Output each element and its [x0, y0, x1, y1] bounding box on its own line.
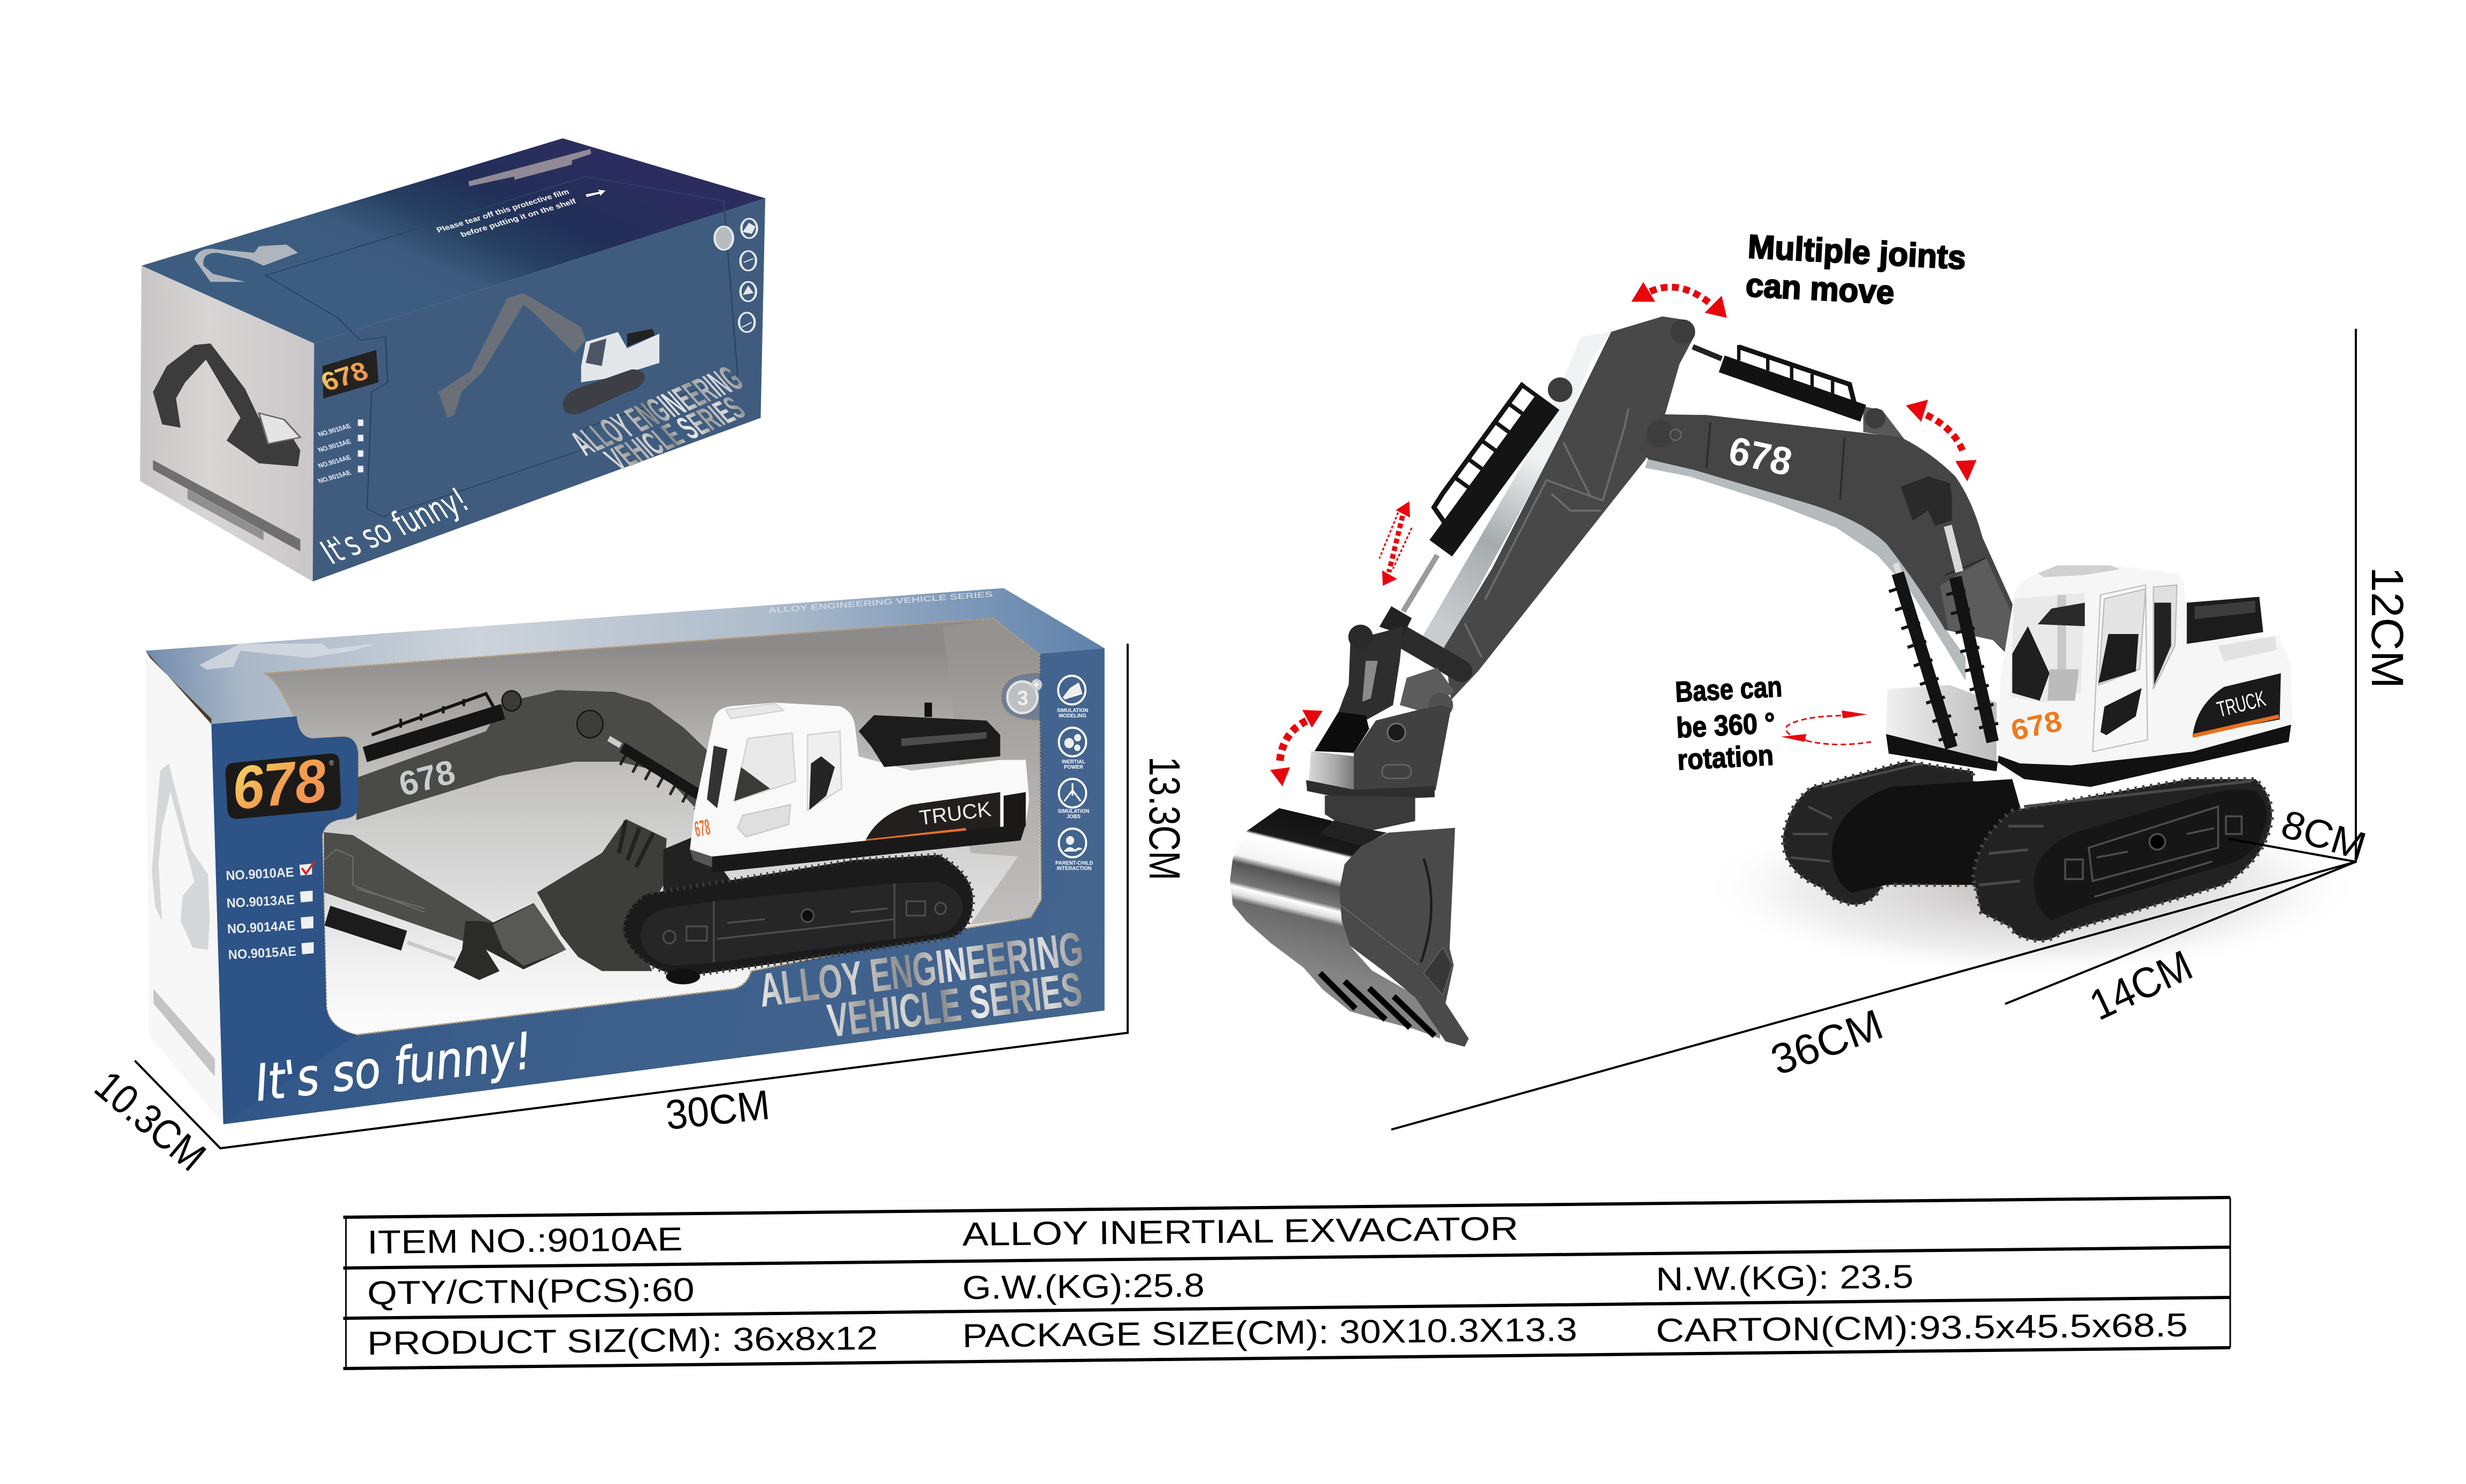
feature icons with captions: SIMULATION: [1058, 808, 1089, 815]
product box: rear angled view: [140, 138, 765, 582]
feature icons with captions: INTERACTION: [1057, 866, 1092, 872]
motion arrow: bucket: [1270, 710, 1323, 786]
model number list: NO.9013AE: [226, 893, 295, 911]
table cells: ALLOY INERTIAL EXVACATOR: [962, 1210, 1519, 1253]
linkage bar: [1400, 635, 1461, 671]
right lift cylinder: [1955, 577, 1993, 742]
bucket hitch: [1320, 821, 1387, 846]
feature icons with captions: POWER: [1064, 764, 1083, 770]
tear-off instruction on top: Please tear off this protective film: [435, 188, 571, 234]
width label: 14CM: [2083, 941, 2199, 1029]
model number list: NO.9010AE: [226, 865, 295, 884]
roof hatch: [726, 704, 784, 718]
door window with seat: [807, 731, 842, 810]
near track top tread: [1979, 781, 2252, 885]
specification table: [343, 1197, 2230, 1369]
table cells: N.W.(KG): 23.5: [1655, 1258, 1914, 1298]
model number list: NO.9010AE: [317, 423, 352, 438]
windshield edge: [707, 746, 727, 808]
left lift cylinder: [1898, 573, 1952, 748]
lower hydraulic cylinder: [327, 916, 455, 960]
centre frame: [1832, 779, 2020, 893]
cab logo: 678: [2008, 705, 2064, 747]
truck label: TRUCK: [2215, 686, 2268, 722]
slogan on front face: It's so funny!: [311, 481, 479, 571]
side plate seam: [1340, 905, 1418, 965]
large excavator illustration: [1230, 316, 2363, 1047]
bucket teeth: [619, 821, 653, 867]
far track tread lines: [1791, 763, 1922, 861]
depth label: 8CM: [2276, 801, 2371, 869]
box depth label: 10.3CM: [86, 1062, 214, 1180]
window outline impression: [266, 176, 738, 517]
table rules: [343, 1197, 2230, 1369]
left lift rod: [1895, 563, 1899, 574]
motion arrow: stick pivot: [1631, 282, 1727, 318]
model number list: NO.9013AE: [317, 438, 352, 454]
box dimension lines: [135, 644, 1128, 1148]
track assembly: [623, 855, 973, 977]
stick pivot: [1670, 320, 1695, 344]
body skirt: [1886, 722, 2292, 787]
near track side plate: [2034, 790, 2267, 920]
table cells: PACKAGE SIZE(CM): 30X10.3X13.3: [962, 1311, 1577, 1355]
linkage side plates: [1338, 627, 1403, 722]
roof hatch: [2038, 566, 2120, 577]
bracket chrome face: [1308, 751, 1354, 794]
box height label: 13.3CM: [1140, 756, 1189, 880]
model number list: NO.9015AE: [317, 469, 352, 485]
engine cover vents: [2218, 636, 2277, 661]
track side plate: [641, 882, 963, 966]
packaged excavator: [324, 676, 1093, 1048]
boom with cylinders: [1638, 345, 2013, 681]
bucket bracket: [1354, 705, 1451, 799]
far track: [1783, 761, 1973, 905]
model number list: [317, 420, 364, 485]
stick arm: [324, 832, 499, 948]
brand logo: ®: [329, 759, 334, 767]
feature icons with captions: [1055, 676, 1093, 872]
model number list: NO.9015AE: [228, 944, 297, 963]
stick emboss: [324, 849, 425, 912]
cab and engine body: [690, 702, 1029, 859]
stick piston rod: [1403, 555, 1437, 612]
boom pivot: [1647, 420, 1674, 447]
lower door vent: [2100, 688, 2141, 735]
model number list: NO.9014AE: [317, 454, 352, 470]
windshield dark panel: [2012, 626, 2049, 701]
product dimension lines: [1391, 329, 2356, 1130]
rear dark panel: [1004, 792, 1026, 830]
age badge: 3: [1018, 687, 1028, 710]
boom logo: 678: [1725, 428, 1796, 484]
truck panel: [2193, 673, 2281, 736]
callout: base rotation: Base can: [1674, 671, 1783, 708]
bracket hole: [1388, 723, 1405, 741]
text: ALLOY ENGINEERING: [562, 359, 752, 463]
hood stack: [924, 702, 932, 717]
packaged excavator: 678: [692, 814, 712, 842]
cab seat base: [2047, 669, 2079, 701]
tear-off instruction on top: before putting it on the shelf: [459, 197, 578, 239]
near track: [1973, 779, 2272, 941]
stick embossed pipes: [1465, 408, 1628, 658]
cab seat: [809, 756, 835, 810]
front strip left of window: [211, 716, 358, 1124]
box left side panel: [145, 651, 224, 1124]
top cylinder: [1693, 345, 1885, 429]
digging bucket: [1230, 808, 1469, 1047]
wear plate: [1424, 947, 1452, 995]
stick cylinder: [1434, 377, 1573, 548]
door outline: [2093, 585, 2147, 752]
boom panel seams: [1706, 422, 1986, 575]
upper hydraulic cylinder: [365, 691, 718, 815]
boom underside: [1645, 458, 1966, 681]
model number list: NO.9014AE: [227, 918, 296, 937]
side plate rib: [1421, 859, 1431, 962]
callout: multiple joints: Multiple joints: [1747, 228, 1967, 276]
motion arrow: boom pivot: [1906, 400, 1976, 482]
callout: base rotation: rotation: [1676, 739, 1774, 776]
box left side face: [140, 266, 314, 582]
table cells: QTY/CTN(PCS):60: [367, 1272, 695, 1312]
series title: [757, 922, 1086, 1048]
ghost excavator on flap: [199, 644, 377, 670]
box length label: 30CM: [664, 1081, 772, 1139]
bracket lower block: [1325, 795, 1415, 834]
truck panel: [864, 792, 1000, 844]
cab shell: [1999, 566, 2293, 766]
truck label: TRUCK: [918, 798, 992, 830]
ground shadow: [1700, 797, 2363, 978]
boom: [356, 690, 725, 820]
miniature excavator on top face: [195, 245, 298, 282]
logo on front face: 678: [314, 357, 375, 397]
boom logo: 678: [396, 753, 459, 804]
door seat: [2099, 634, 2139, 683]
slogan: It's so funny!: [252, 1022, 535, 1112]
feature icons with captions: SIMULATION: [1057, 708, 1088, 714]
model number list: [226, 865, 297, 963]
series title: ALLOY ENGINEERING: [757, 922, 1086, 1017]
hood vent: [2194, 601, 2255, 619]
flap edge: [145, 651, 211, 724]
callout: multiple joints: [1745, 228, 1967, 312]
box top flap: [145, 588, 1105, 724]
cab side window: [734, 733, 796, 801]
motion arrow: stick cylinder: [1380, 501, 1412, 586]
rear undercarriage: [663, 835, 731, 900]
seat backrest: [2038, 602, 2085, 626]
rear window dark: [2154, 602, 2171, 685]
lower door window: [738, 805, 790, 837]
undercarriage and cab: [1783, 566, 2293, 941]
motion arrow: base rotation: [1781, 710, 1871, 745]
cab pillar: [2057, 595, 2066, 677]
callout: multiple joints: can move: [1745, 267, 1895, 312]
feature icons with captions: MODELING: [1059, 713, 1086, 719]
orange stripe: [2193, 716, 2279, 736]
age badge: [1007, 679, 1042, 713]
stick body: [1444, 316, 1695, 700]
boom cylinder head: [1901, 476, 1960, 572]
engine hood: [2187, 597, 2263, 644]
length label: 36CM: [1764, 1000, 1889, 1084]
boom body: [1638, 414, 2013, 657]
age badge and feature icons: [715, 219, 757, 332]
window opening with interior: [264, 619, 1041, 1035]
bucket side plate: [1339, 828, 1469, 1047]
series title: VEHICLE SERIES: [825, 963, 1085, 1048]
hood vent: [901, 732, 987, 746]
brand logo: 678: [230, 746, 329, 822]
right interior wall shadow: [943, 619, 1039, 925]
side plate details: [2065, 807, 2241, 896]
boom translucent lower panel: [1940, 558, 2012, 654]
product box: front view: [145, 588, 1105, 1124]
track details: [663, 884, 946, 962]
feature icons with captions: PARENT-CHILD: [1055, 860, 1093, 867]
model check boxes: [299, 861, 315, 954]
door window: [2099, 589, 2146, 685]
lower skirt: [712, 824, 1026, 872]
table cells: [367, 1210, 2188, 1362]
table cells: G.W.(KG):25.8: [962, 1267, 1205, 1307]
callout: base rotation: be 360 °: [1675, 707, 1776, 744]
linkage bracket: [493, 904, 566, 966]
table cells: PRODUCT SIZ(CM): 36x8x12: [367, 1320, 878, 1362]
series title on front face: [562, 359, 753, 477]
height label: 12CM: [2362, 567, 2413, 689]
feature icons with captions: INERTIAL: [1062, 759, 1085, 765]
box top face: [142, 138, 765, 343]
age badge: +: [1033, 679, 1039, 691]
bucket: [537, 819, 667, 971]
stick and bucket linkage: [1306, 316, 1695, 834]
feature icons with captions: JOBS: [1067, 814, 1081, 820]
windshield opening: [2010, 593, 2085, 702]
rod head: [1380, 606, 1412, 635]
box front face: [313, 198, 765, 582]
linkage gaps: [1362, 661, 1378, 702]
table cells: ITEM NO.:9010AE: [367, 1221, 683, 1261]
callout: base rotation: [1674, 671, 1783, 776]
rear deck: [1886, 685, 1997, 761]
top series banner: [468, 149, 591, 186]
bracket flange: [1306, 780, 1435, 801]
rear window: [2153, 585, 2177, 689]
table cells: CARTON(CM):93.5x45.5x68.5: [1655, 1307, 2188, 1349]
boom brace: [1863, 406, 1904, 439]
box front panel: [211, 648, 1105, 1124]
stick light underside: [1420, 332, 1611, 651]
orange stripe: [866, 830, 966, 841]
track wheel: [666, 969, 700, 984]
bracket opening: [1315, 712, 1369, 753]
bucket shell: [1230, 808, 1440, 1039]
excavator image on front face: [438, 293, 659, 418]
ghost title on flap: ALLOY ENGINEERING VEHICLE SERIES: [768, 590, 993, 615]
dark triangle in window: [734, 767, 770, 801]
bucket teeth: [1320, 973, 1435, 1036]
bucket linkage: [453, 903, 566, 980]
engine hood: [859, 715, 1000, 767]
text: VEHICLE SERIES: [597, 390, 753, 477]
